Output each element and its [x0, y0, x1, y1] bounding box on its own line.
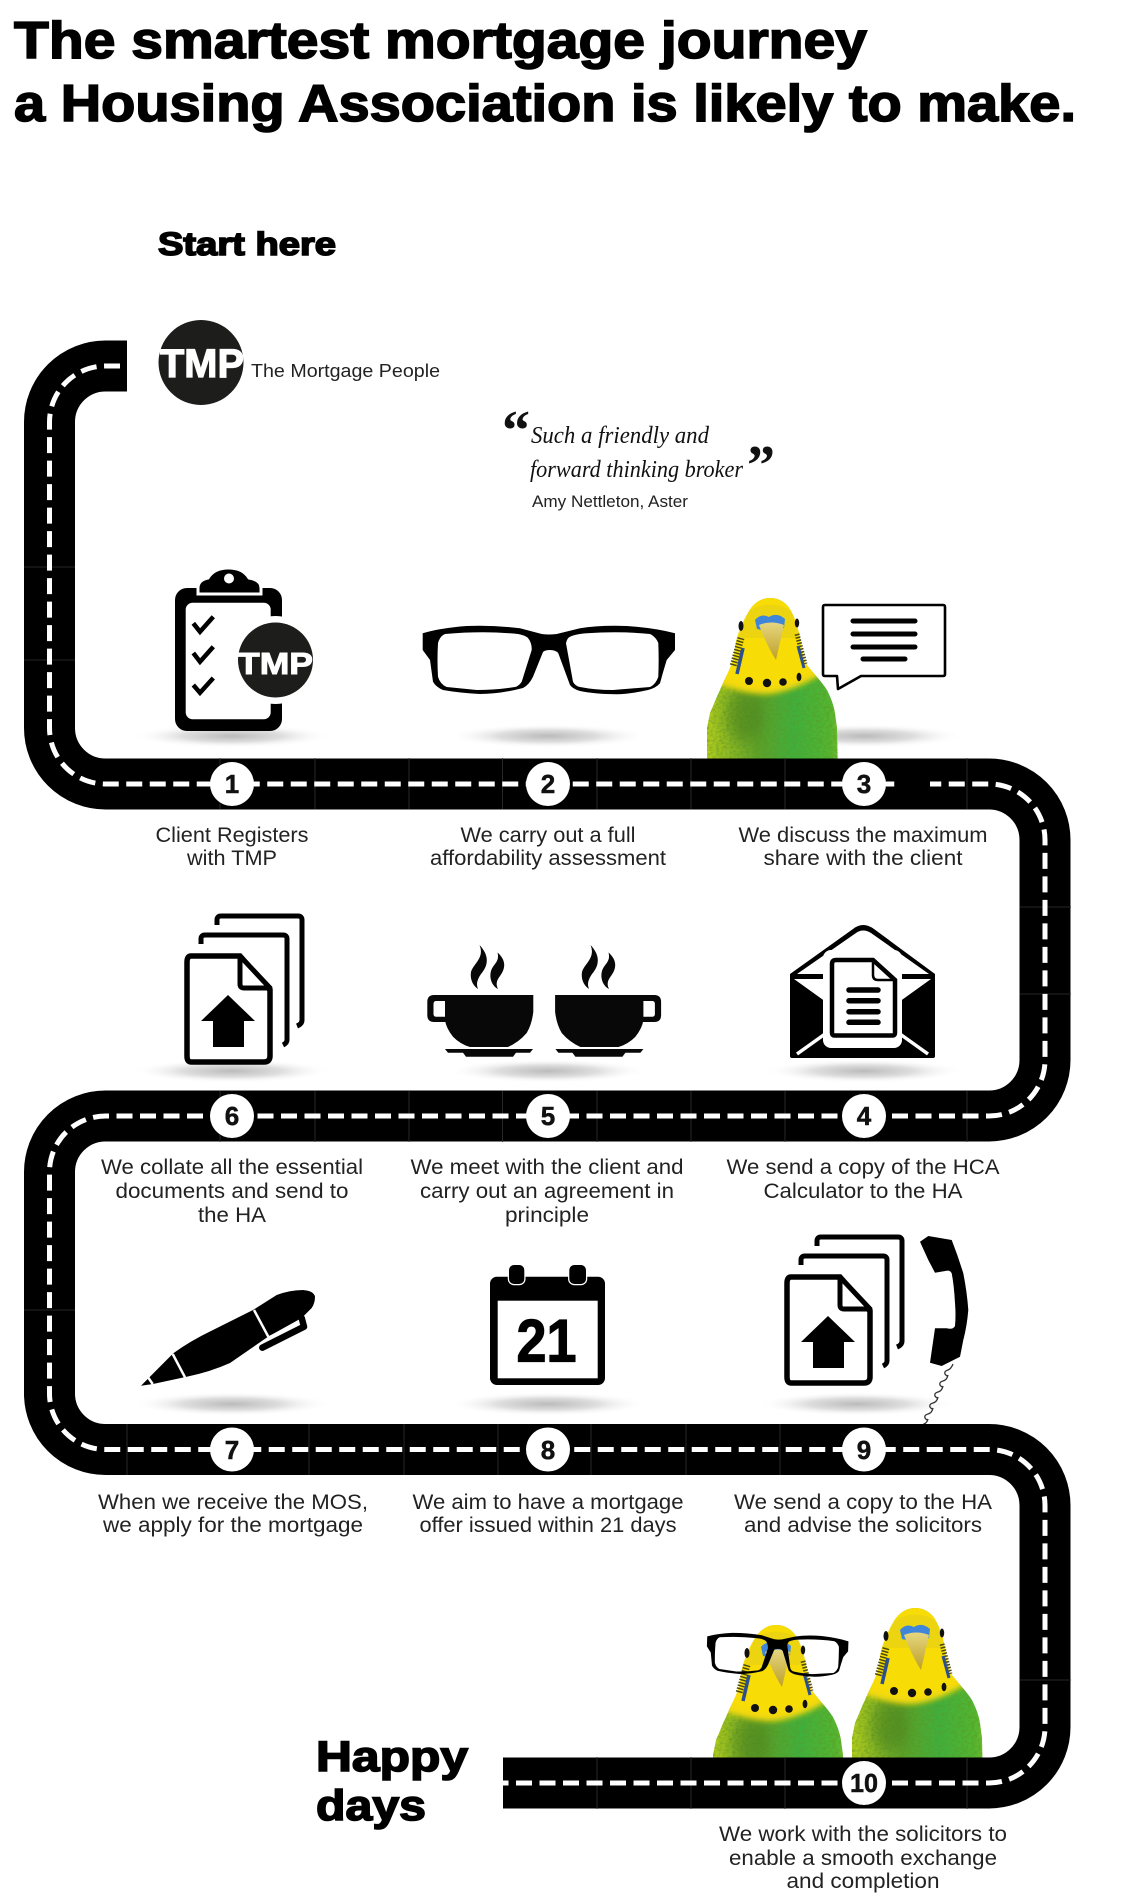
label: step 8: [412, 1491, 684, 1537]
winding road: [24, 366, 1071, 1809]
step number badges: 3: [857, 769, 871, 799]
icon: pen: [141, 1290, 315, 1386]
label: step 8: offer issued within 21 days: [420, 1514, 676, 1537]
label: step 1: Client Registers: [156, 824, 308, 847]
parrot at step 10: [845, 1603, 990, 1783]
step number badges: 6: [225, 1101, 239, 1131]
label: step 2: affordability assessment: [430, 847, 666, 870]
label: step 1: with TMP: [186, 847, 277, 870]
label: step 8: We aim to have a mortgage: [412, 1491, 684, 1514]
label: step 5: [410, 1156, 684, 1227]
label: step 7: [98, 1491, 368, 1537]
logo: The Mortgage People: [158, 320, 440, 405]
icon: stacked documents with upload arrow: [187, 916, 302, 1062]
icon: telephone handset: [920, 1236, 968, 1366]
icon: clipboard with TMP logo: TMP: [238, 646, 313, 681]
logo: The Mortgage People: The Mortgage People: [251, 361, 440, 381]
parrot at step 3: [700, 593, 845, 773]
testimonial quote: forward thinking broker: [530, 457, 744, 483]
step number badges: 7: [225, 1435, 239, 1465]
icon: envelope with document: [790, 925, 935, 1058]
label: step 10: enable a smooth exchange: [729, 1847, 997, 1870]
title: The smartest mortgage journey: [14, 12, 867, 70]
icon: stacked documents: [787, 1237, 902, 1383]
testimonial quote: “: [502, 400, 530, 462]
step number badges: [210, 762, 886, 1805]
icon: two coffee cups: [427, 945, 661, 1057]
step number badges: 1: [225, 769, 239, 799]
label: step 2: We carry out a full: [460, 824, 636, 847]
step number badges: 5: [541, 1101, 555, 1131]
speech bubble icon: [823, 605, 945, 689]
label: step 6: [101, 1156, 363, 1227]
label: step 3: [738, 824, 988, 870]
label: step 7: When we receive the MOS,: [98, 1491, 368, 1514]
label: step 5: principle: [505, 1204, 589, 1227]
label: step 4: [726, 1156, 1000, 1203]
phone cord: [921, 1364, 953, 1428]
label: step 5: We meet with the client and: [410, 1156, 684, 1179]
label: step 10: [719, 1823, 1007, 1893]
parrot wearing glasses: [706, 1620, 851, 1800]
label: step 4: We send a copy of the HCA: [726, 1156, 1000, 1179]
happy days heading: [316, 1733, 468, 1830]
label: step 10: We work with the solicitors to: [719, 1823, 1007, 1846]
title: [14, 12, 1076, 133]
happy days heading: Happy: [316, 1733, 468, 1781]
happy days heading: days: [316, 1782, 426, 1830]
label: step 6: the HA: [198, 1204, 266, 1227]
label: step 9: and advise the solicitors: [744, 1514, 982, 1537]
label: step 7: we apply for the mortgage: [102, 1514, 363, 1537]
icon: calendar showing 21: 21: [516, 1308, 576, 1375]
icon: clipboard with TMP logo: [175, 568, 320, 731]
icon shadows: [132, 724, 964, 1416]
label: step 5: carry out an agreement in: [420, 1180, 674, 1203]
label: step 6: documents and send to: [116, 1180, 348, 1203]
step number badges: 8: [541, 1435, 555, 1465]
label: step 10: and completion: [786, 1870, 940, 1893]
step number badges: 2: [541, 769, 555, 799]
start here heading: Start here: [158, 226, 336, 262]
step number badges: 9: [857, 1435, 871, 1465]
step number badges: 4: [857, 1101, 872, 1131]
label: step 9: [734, 1491, 992, 1537]
label: step 4: Calculator to the HA: [764, 1180, 962, 1203]
testimonial quote: ”: [747, 435, 775, 497]
label: step 6: We collate all the essential: [101, 1156, 363, 1179]
testimonial quote: [502, 400, 775, 511]
label: step 1: [156, 824, 308, 870]
icon: calendar showing 21: [490, 1265, 605, 1385]
title: a Housing Association is likely to make.: [14, 75, 1076, 133]
testimonial quote: Amy Nettleton, Aster: [532, 493, 689, 511]
logo: The Mortgage People: TMP: [160, 342, 244, 386]
label: step 3: share with the client: [764, 847, 963, 870]
label: step 3: We discuss the maximum: [738, 824, 988, 847]
icon: glasses: [423, 626, 675, 694]
label: step 9: We send a copy to the HA: [734, 1491, 992, 1514]
label: step 2: [430, 824, 666, 870]
testimonial quote: Such a friendly and: [531, 423, 710, 449]
step number badges: 10: [850, 1768, 878, 1798]
